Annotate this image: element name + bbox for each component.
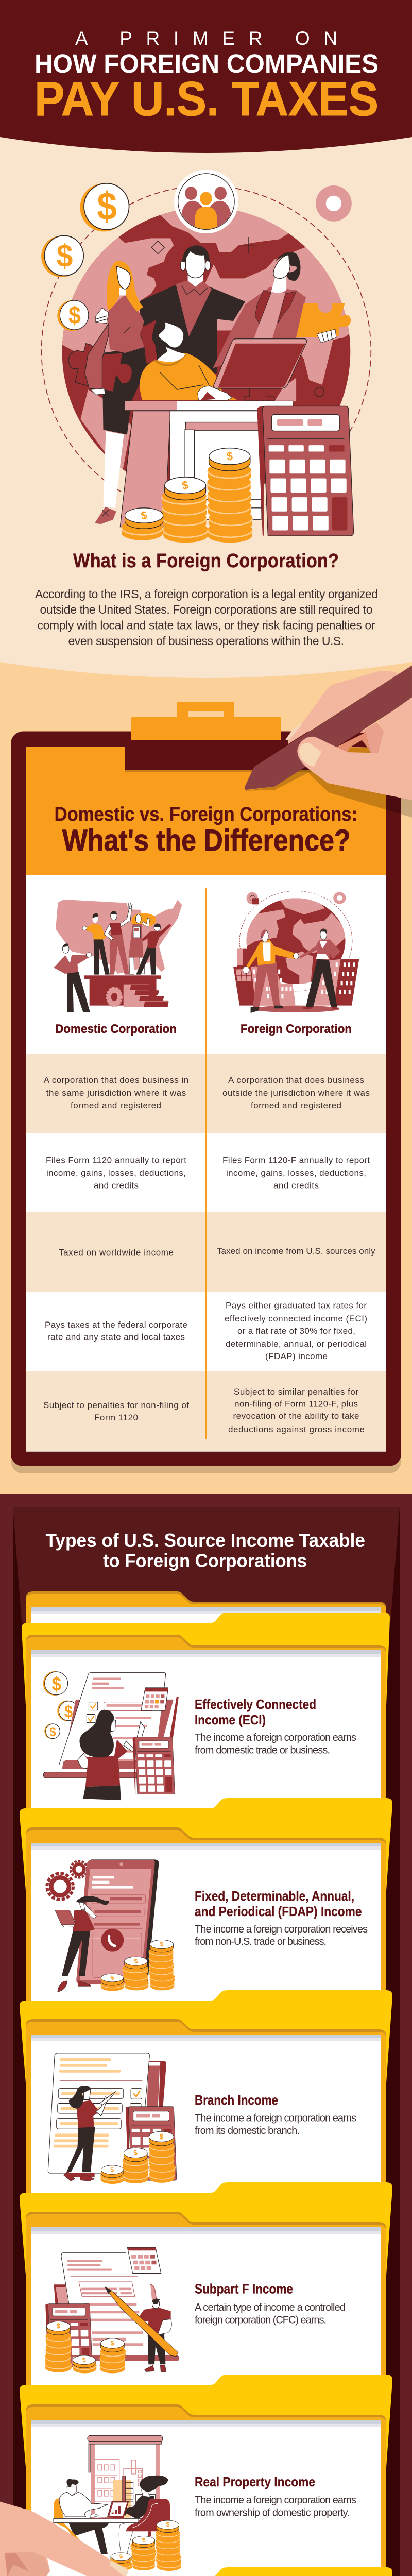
base bar (74, 2355, 179, 2361)
heading: types of income: Types of U.S. Source Income Taxable (45, 1530, 365, 1551)
palm and thumb (297, 697, 412, 800)
intro paragraph: even suspension of business operations within the U.S. (68, 634, 344, 648)
hand pointing at the folders (0, 2502, 128, 2576)
person: woman with clipboard (129, 913, 156, 975)
man in orange jacket (243, 930, 295, 1013)
heading: FDAP: and Periodical (FDAP) Income (195, 1904, 362, 1919)
coin stacks: $ (110, 2165, 115, 2174)
title (35, 28, 379, 126)
empty top folder (26, 1591, 386, 1769)
row 1 domestic: formed and registered (71, 1100, 161, 1110)
title: PAY U.S. TAXES (35, 72, 379, 126)
row 4 foreign: (FDAP) income (265, 1351, 328, 1361)
row 5 foreign: revocation of the ability to take (233, 1411, 359, 1421)
row 2 foreign: Files Form 1120-F annually to report (222, 1155, 370, 1165)
description: real property: from ownership of domestic property. (195, 2507, 350, 2519)
panel: filing drawer background (0, 1494, 412, 2576)
coin stacks (122, 448, 252, 543)
coin stacks: $ (142, 2537, 146, 2544)
intro paragraph: According to the IRS, a foreign corporation is a legal entity organized (35, 587, 378, 601)
woman (78, 1710, 145, 1800)
illustration: meeting at a window (54, 2435, 181, 2571)
floating ring (247, 892, 346, 904)
row 4 domestic: rate and any state and local taxes (47, 1332, 185, 1342)
pen (245, 666, 412, 790)
row 4 foreign (225, 1301, 367, 1361)
illustration: domestic corporation (54, 900, 182, 1012)
folder: FDAP income (20, 1798, 392, 2005)
column heading: foreign corporation: Foreign Corporation (241, 1022, 352, 1036)
heading: subpart F: Subpart F Income (195, 2281, 293, 2297)
coin stacks: $ (160, 2132, 163, 2140)
person: orange sweater (82, 913, 110, 975)
row 2 domestic: Files Form 1120 annually to report (46, 1155, 186, 1165)
row 5 domestic: Subject to penalties for non-filing of (43, 1400, 189, 1410)
binder (146, 2061, 166, 2141)
coin stacks: $ (140, 509, 148, 522)
description: ECI (195, 1732, 356, 1756)
desk (120, 401, 293, 527)
decorative ring (316, 185, 352, 222)
coin icons: $ (97, 185, 117, 228)
row 5 domestic: Form 1120 (94, 1413, 138, 1422)
row 2 domestic (46, 1155, 186, 1191)
row 1 foreign: A corporation that does business (228, 1075, 364, 1085)
coin stacks (111, 2520, 181, 2571)
title: A PRIMER ON (75, 28, 337, 49)
person: raised arm man (104, 903, 132, 975)
coin stacks: $ (133, 2148, 139, 2157)
coin stacks: $ (110, 2338, 115, 2347)
hand holding pen (245, 666, 412, 818)
row 4 foreign: or a flat rate of 30% for fixed, (237, 1326, 355, 1336)
coin stacks: $ (133, 1957, 139, 1965)
coin stacks: $ (226, 449, 233, 463)
man with pencil (105, 2286, 178, 2372)
description: subpart F: foreign corporation (CFC) earns. (195, 2314, 327, 2326)
heading: types of income: to Foreign Corporations (103, 1550, 307, 1571)
coin icons (41, 183, 129, 331)
hand shadow (245, 759, 412, 818)
coin stacks: $ (110, 1975, 115, 1981)
description: FDAP: from non-U.S. trade or business. (195, 1936, 327, 1947)
center man (140, 245, 245, 373)
illustration: woman filling in a form (43, 1671, 179, 1800)
computer monitor (214, 339, 307, 400)
heading: ECI: Effectively Connected (195, 1697, 316, 1712)
woman (55, 1896, 109, 1992)
coin stacks: $ (160, 1941, 164, 1948)
comparison heading (55, 804, 357, 857)
phone (76, 1859, 159, 1984)
laptop (43, 1697, 179, 1778)
calculator (133, 1737, 175, 1794)
illustration: foreign corporation (233, 891, 359, 1013)
clipboard clip (131, 702, 281, 740)
orange heading sheet (26, 747, 386, 875)
table and laptop (54, 2501, 139, 2523)
man in red jacket (294, 929, 341, 1009)
description: FDAP: The income a foreign corporation receives (195, 1924, 368, 1935)
coin stacks: $ (181, 478, 190, 493)
gears (47, 1861, 87, 1900)
row 4 foreign: determinable, annual, or periodical (226, 1339, 367, 1349)
description: branch income: The income a foreign corporation earns (195, 2112, 356, 2124)
document (61, 2253, 158, 2355)
empty folder behind the drawer edge (20, 2567, 392, 2576)
heading: ECI (195, 1697, 316, 1727)
heading: FDAP: Fixed, Determinable, Annual, (195, 1888, 354, 1904)
row 1 foreign (222, 1075, 370, 1110)
globe (62, 211, 350, 484)
people badge (174, 170, 238, 233)
row 1 foreign: formed and registered (251, 1100, 341, 1110)
dashed orbit (42, 185, 371, 516)
upper finger (288, 666, 412, 744)
illustration: man with giant pencil (45, 2248, 179, 2373)
coin stacks (101, 1940, 175, 1991)
calendar (127, 2248, 161, 2273)
row 1 domestic: the same jurisdiction where it was (46, 1088, 186, 1098)
folder: subpart F income (20, 2182, 392, 2389)
woman (63, 2086, 115, 2181)
city buildings (233, 949, 359, 1006)
coin icons: $ (57, 238, 73, 274)
folder: real property income (20, 2375, 392, 2576)
row 4 foreign: Pays either graduated tax rates for (226, 1301, 367, 1311)
small globe marks (151, 241, 164, 254)
calculator (126, 2107, 177, 2180)
comparison heading: Domestic vs. Foreign Corporations: (55, 804, 357, 825)
coin stacks: $ (166, 2521, 170, 2528)
podium and stairs (84, 975, 169, 1007)
row 2 foreign (222, 1155, 370, 1191)
woman seated (119, 2476, 170, 2554)
panel: clipboard comparison (11, 702, 401, 1473)
row 5 foreign: non-filing of Form 1120-F, plus (234, 1399, 358, 1409)
row 1 domestic: A corporation that does business in (44, 1075, 188, 1085)
description: real property (195, 2495, 356, 2519)
row 1 domestic (44, 1075, 188, 1110)
heading: ECI: Income (ECI) (195, 1712, 266, 1727)
left woman (68, 261, 147, 524)
right woman with puzzle piece (213, 252, 351, 368)
person: waving man (136, 924, 171, 975)
seated person in orange (140, 321, 237, 400)
row 4 domestic: Pays taxes at the federal corporate (45, 1320, 187, 1330)
heading: types of income (45, 1530, 365, 1571)
title: HOW FOREIGN COMPANIES (35, 49, 379, 78)
row 5 domestic (43, 1400, 189, 1422)
illustration: woman with tablet and phone (47, 1859, 175, 1992)
comparison heading: What's the Difference? (62, 824, 351, 857)
calculator (257, 406, 354, 536)
ground shadow (252, 1006, 339, 1012)
thumb nail (299, 743, 321, 767)
row 3 domestic: Taxed on worldwide income (59, 1248, 174, 1257)
row 4 foreign: effectively connected income (ECI) (225, 1314, 367, 1324)
intro paragraph (35, 587, 378, 648)
row 5 foreign: deductions against gross income (228, 1425, 365, 1434)
globe (244, 893, 348, 984)
US map (56, 900, 182, 974)
laptop backs (54, 2284, 164, 2354)
coin icons: $ (68, 301, 81, 329)
clipboard board (11, 732, 401, 1473)
row 5 foreign: Subject to similar penalties for (234, 1387, 358, 1397)
heading: FDAP (195, 1888, 362, 1919)
description: subpart F: A certain type of income a controlled (195, 2302, 346, 2313)
description: ECI: The income a foreign corporation earns (195, 1732, 356, 1743)
column heading: domestic corporation: Domestic Corporation (55, 1022, 177, 1036)
description: branch income (195, 2112, 356, 2137)
gap between fingers (336, 722, 384, 753)
illustration: woman checking a list (48, 2053, 177, 2184)
window and city (88, 2435, 163, 2523)
row 2 foreign: income, gains, losses, deductions, (226, 1168, 366, 1178)
coins: $ (52, 1673, 61, 1695)
intro paragraph: outside the United States. Foreign corporations are still required to (40, 603, 373, 616)
calculator (45, 2304, 92, 2367)
row 5 foreign (228, 1387, 365, 1434)
intro paragraph: comply with local and state tax laws, or they risk facing penalties or (37, 618, 375, 632)
coin stacks: $ (57, 2322, 60, 2330)
header band (0, 0, 412, 153)
heading: real property: Real Property Income (195, 2474, 315, 2489)
coins: $ (50, 1724, 56, 1739)
coin stacks: $ (82, 2355, 87, 2364)
coins: $ (64, 1702, 73, 1721)
row 4 domestic (45, 1320, 187, 1342)
coin stacks: $ (119, 2553, 123, 2560)
calendar (141, 1688, 168, 1710)
person: standing man left (54, 943, 92, 1012)
row 2 domestic: income, gains, losses, deductions, (46, 1168, 186, 1178)
coin stacks (45, 2321, 126, 2373)
row 2 foreign: and credits (273, 1181, 319, 1191)
table sheet (26, 875, 386, 1452)
description: FDAP (195, 1924, 368, 1947)
description: subpart F (195, 2302, 346, 2326)
folder: effectively connected income (22, 1613, 390, 1812)
dashed arc (239, 891, 352, 991)
row 2 domestic: and credits (94, 1181, 139, 1191)
coin stacks (100, 2131, 175, 2184)
peach section background (0, 662, 412, 1494)
row 3 foreign: Taxed on income from U.S. sources only (217, 1246, 375, 1256)
description: branch income: from its domestic branch. (195, 2125, 300, 2137)
document (48, 2053, 149, 2173)
heading: branch income: Branch Income (195, 2092, 278, 2108)
folder: branch income (20, 1990, 392, 2197)
coins (43, 1671, 78, 1739)
form sheet (59, 1673, 166, 1765)
man seated (54, 2479, 109, 2554)
description: ECI: from domestic trade or business. (195, 1744, 330, 1756)
hero illustration: team around a globe with coins and calculator (41, 170, 371, 543)
row 1 foreign: outside the jurisdiction where it was (222, 1088, 370, 1098)
heading: what is a foreign corporation: What is a Foreign Corporation? (73, 550, 339, 572)
description: real property: The income a foreign corporation earns (195, 2495, 356, 2506)
